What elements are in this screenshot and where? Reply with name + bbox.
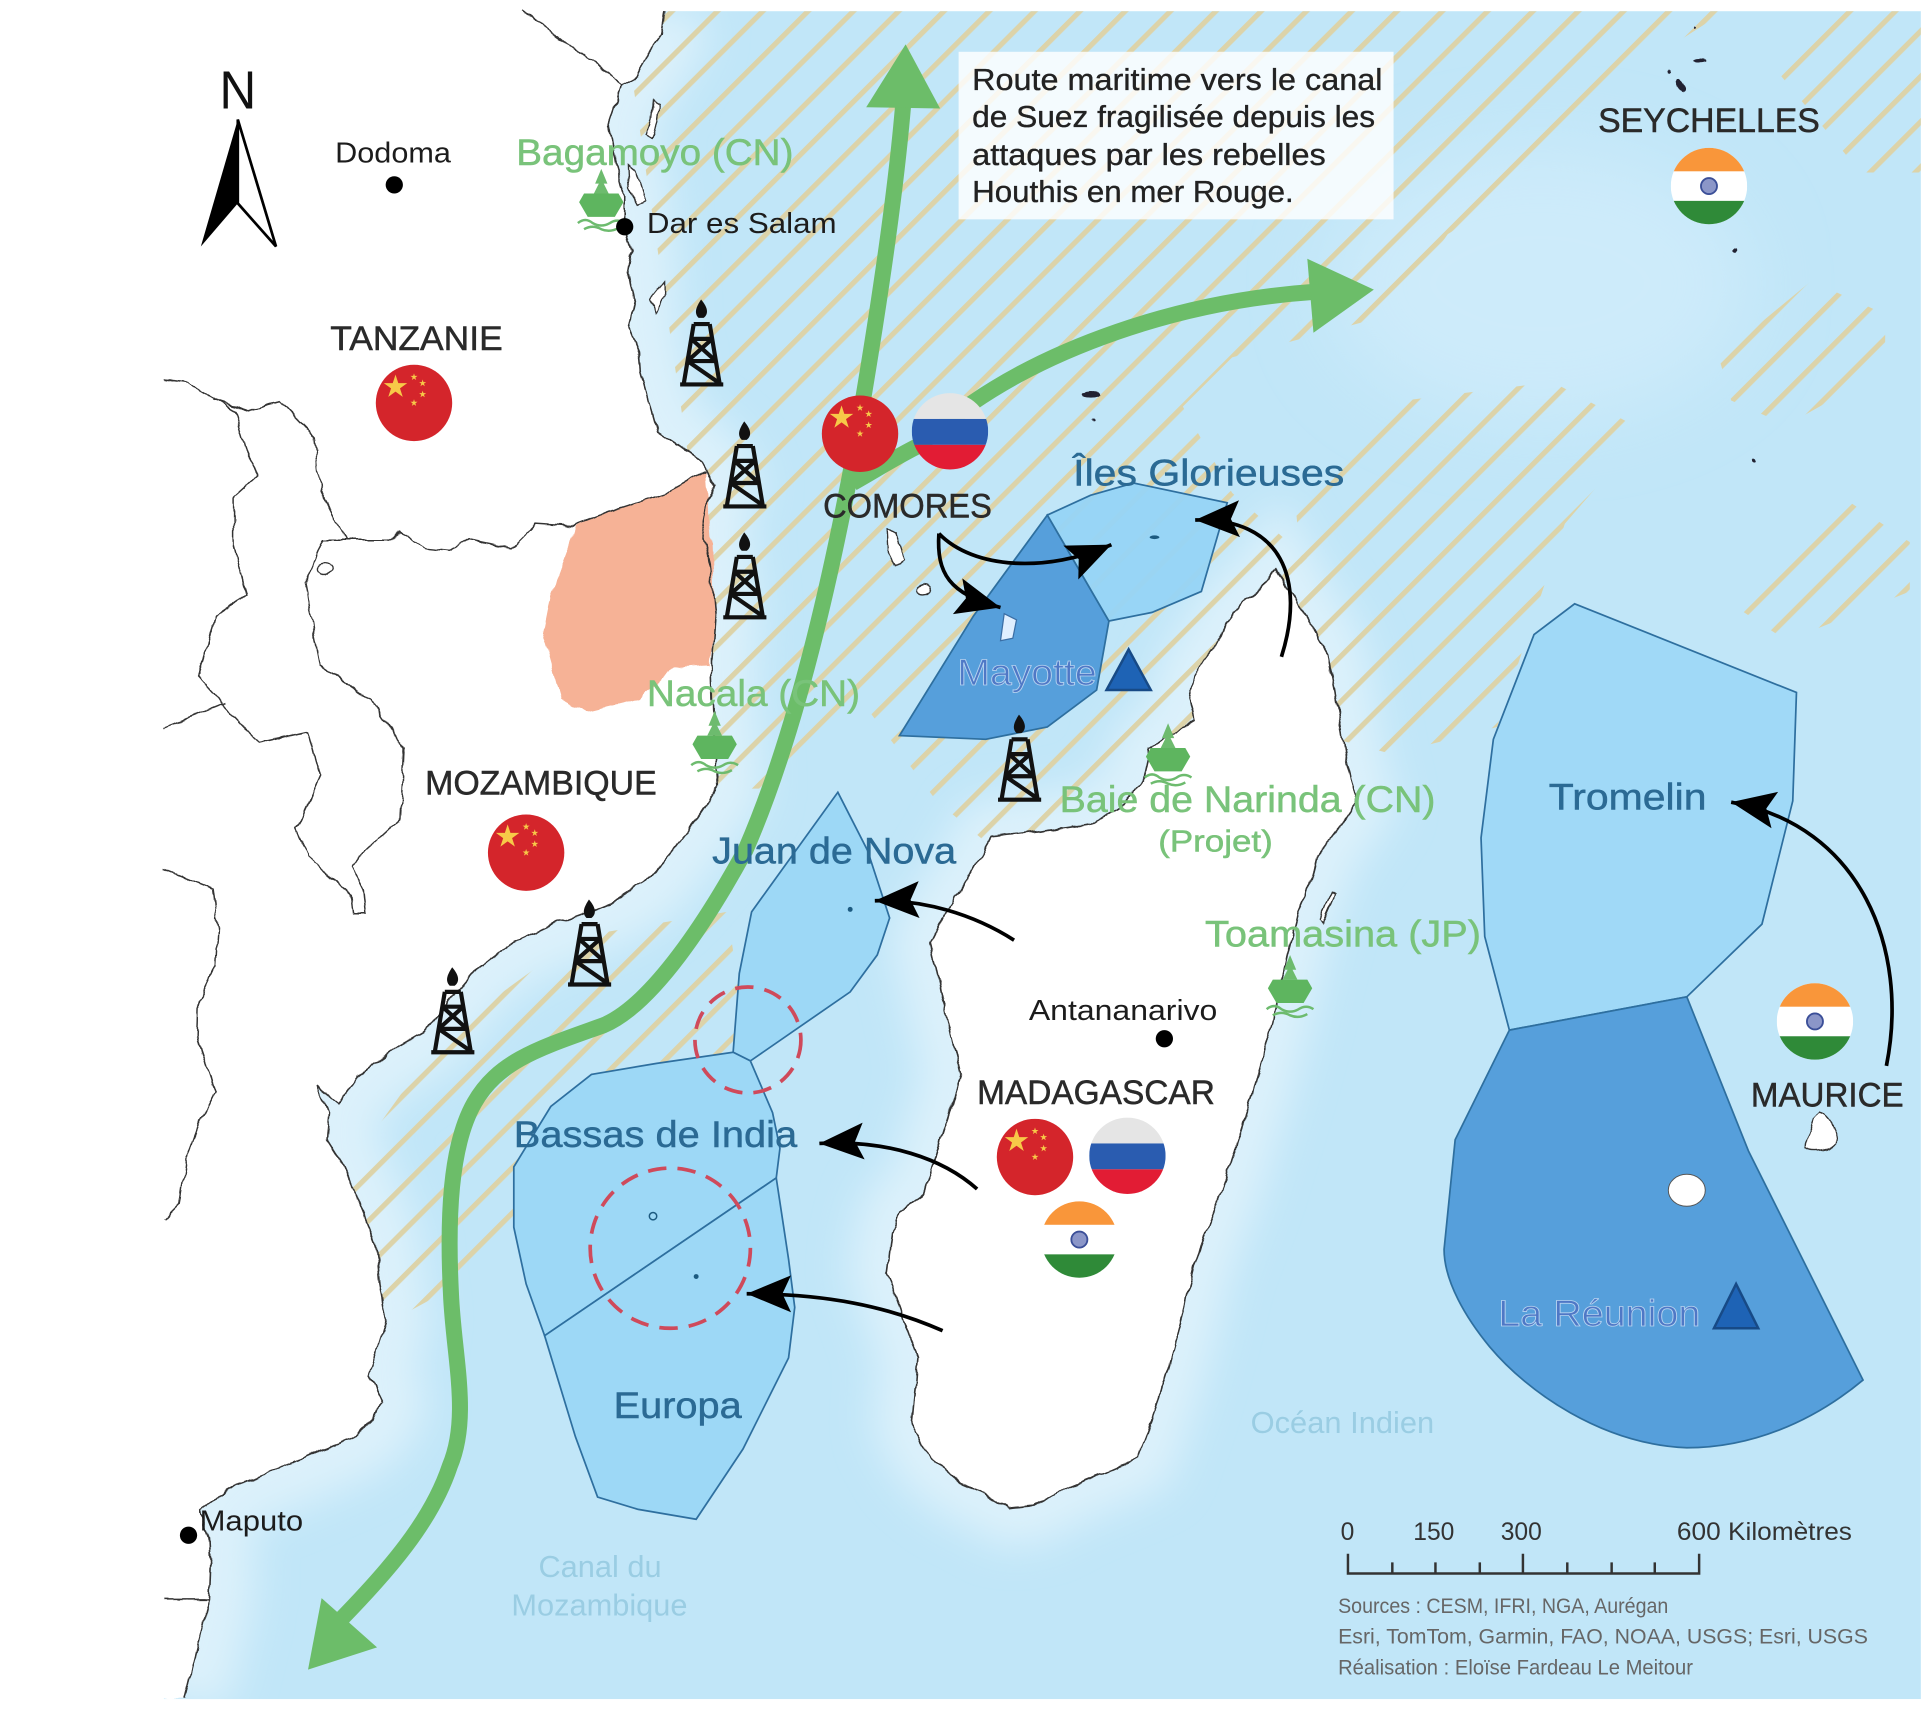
tension circle: Bassas / Europa — [590, 1168, 750, 1328]
labels: maritime zones: Îles Glorieuses — [1072, 452, 1344, 493]
labels: countries: TANZANIE — [330, 320, 503, 358]
labels: maritime zones: Tromelin — [1549, 777, 1707, 818]
scale bar: 600 Kilomètres — [1677, 1519, 1852, 1546]
labels: countries — [330, 102, 1904, 1114]
maritime zone: Bassas de India — [514, 1052, 780, 1336]
labels: ports: Bagamoyo (CN) — [516, 132, 793, 173]
labels: ports: Toamasina (JP) — [1205, 913, 1481, 954]
labels: capitals and cities: Dodoma — [335, 138, 451, 170]
ports: ship icons — [578, 169, 1313, 1017]
sources credits: Réalisation : Eloïse Fardeau Le Meitour — [1338, 1657, 1693, 1680]
labels: capitals and cities: Maputo — [200, 1505, 303, 1537]
flags — [376, 142, 1853, 1284]
small islands — [318, 100, 1838, 1151]
labels: maritime zones: Europa — [614, 1385, 742, 1426]
country borders — [164, 11, 706, 1599]
labels: countries: MAURICE — [1751, 1076, 1904, 1114]
scale bar: 150 — [1413, 1519, 1454, 1546]
labels: maritime zones: Bassas de India — [514, 1114, 798, 1155]
labels: capitals and cities — [180, 138, 1217, 1544]
maritime zone: Europa — [545, 1178, 795, 1519]
land: Nampula region highlighted — [542, 472, 715, 712]
labels: maritime zones: Juan de Nova — [712, 831, 957, 872]
black arrows: claims — [747, 520, 1892, 1331]
maritime zone: La Réunion — [1444, 997, 1863, 1448]
callout: Suez route: de Suez fragilisée depuis les — [972, 99, 1375, 134]
sources credits: Sources : CESM, IFRI, NGA, Aurégan — [1338, 1595, 1668, 1618]
scale bar: 300 — [1501, 1519, 1542, 1546]
labels: seas — [511, 1405, 1434, 1622]
labels: ports: (Projet) — [1158, 823, 1273, 858]
labels: ports: Nacala (CN) — [647, 673, 860, 714]
labels: countries: MADAGASCAR — [977, 1074, 1215, 1112]
shipping route branch to east with arrow — [853, 259, 1374, 483]
maritime zone: Tromelin — [1481, 604, 1796, 1030]
shipping route to south with arrow — [308, 44, 940, 1670]
labels: capitals and cities: Antananarivo — [1029, 995, 1217, 1027]
labels: maritime zones: La Réunion — [1498, 1293, 1700, 1334]
labels: seas: Canal du — [538, 1549, 662, 1584]
tension circle: Juan de Nova / Bassas — [695, 987, 801, 1093]
tiny islands and atolls — [1081, 26, 1755, 463]
labels: seas: Océan Indien — [1251, 1405, 1434, 1440]
labels: maritime zones: Mayotte — [957, 652, 1097, 693]
land: Madagascar — [887, 568, 1357, 1508]
labels: seas: Mozambique — [511, 1587, 688, 1622]
labels: countries: COMORES — [823, 488, 992, 526]
labels: maritime zones — [514, 452, 1707, 1426]
north arrow: N — [219, 60, 256, 120]
labels: ports — [516, 132, 1481, 954]
callout: Suez route — [959, 52, 1394, 219]
labels: capitals and cities: Dar es Salam — [647, 208, 837, 240]
oil rigs — [431, 299, 1041, 1052]
labels: countries: SEYCHELLES — [1598, 102, 1820, 140]
north arrow — [201, 60, 276, 246]
coastline: Africa — [185, 11, 718, 1699]
maritime zone: Juan de Nova — [733, 792, 890, 1061]
scale bar: 0 — [1341, 1519, 1354, 1546]
callout: Suez route: attaques par les rebelles — [972, 137, 1326, 172]
callout: Suez route: Route maritime vers le canal — [972, 62, 1382, 97]
hatched zones: maritime tension areas — [333, 11, 1921, 1325]
maritime zone: Mayotte — [899, 515, 1109, 739]
maritime zone: Îles Glorieuses — [1047, 483, 1227, 621]
land: mainland Africa — [0, 0, 718, 1699]
labels: ports: Baie de Narinda (CN) — [1060, 779, 1435, 820]
French overseas territory triangles — [1106, 649, 1758, 1328]
scale bar — [1341, 1519, 1852, 1573]
zone islands — [649, 535, 1705, 1279]
sources credits — [1338, 1595, 1868, 1680]
labels: countries: MOZAMBIQUE — [425, 765, 657, 803]
callout: Suez route: Houthis en mer Rouge. — [972, 174, 1294, 209]
sources credits: Esri, TomTom, Garmin, FAO, NOAA, USGS; Esri, USGS — [1338, 1626, 1868, 1649]
